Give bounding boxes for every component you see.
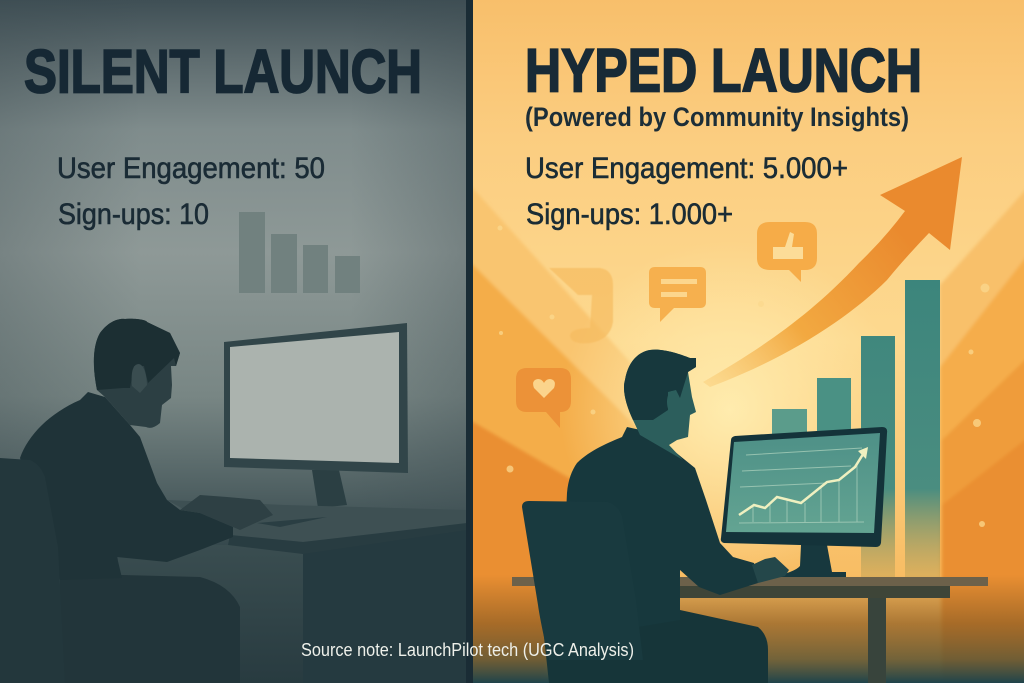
chair (522, 501, 643, 660)
bar chart: rising teal bars (772, 280, 940, 578)
bar chart: declining faded bars (239, 212, 360, 293)
subheading: (Powered by Community Insights) (525, 102, 909, 132)
icon: heart bubble (516, 368, 571, 428)
background sparkles (498, 226, 990, 527)
desk (512, 577, 988, 683)
monitor: rising chart (721, 427, 887, 577)
chart grid (739, 448, 864, 523)
person: teal figure at desk (540, 350, 789, 683)
panel: silent launch (0, 0, 467, 683)
divider (466, 0, 473, 683)
panel background: grey (0, 0, 467, 683)
growth arrow (703, 157, 962, 387)
monitor: blank screen (224, 323, 408, 508)
metric: user engagement 5.000+: User Engagement: 5.000+ (525, 152, 848, 185)
panel background: warm (473, 0, 1024, 683)
chart line (739, 447, 868, 515)
icon: chat bubble (649, 267, 706, 322)
person: silhouette at desk (20, 319, 273, 683)
icon: faded bubble (549, 268, 613, 343)
heading: silent launch: SILENT LAUNCH (24, 38, 422, 106)
metric: sign-ups 1.000+: Sign-ups: 1.000+ (526, 198, 733, 231)
background rays (470, 0, 1024, 683)
icon: thumbs up bubble (757, 222, 817, 282)
metric: user engagement 50: User Engagement: 50 (57, 152, 325, 185)
chair (0, 458, 65, 683)
source note: Source note: LaunchPilot tech (UGC Analysis) (301, 640, 634, 660)
desk (118, 500, 467, 683)
bottom fade (473, 575, 1024, 683)
heading: hyped launch: HYPED LAUNCH (525, 36, 922, 104)
metric: sign-ups 10: Sign-ups: 10 (58, 198, 209, 231)
panel: hyped launch (470, 0, 1024, 683)
